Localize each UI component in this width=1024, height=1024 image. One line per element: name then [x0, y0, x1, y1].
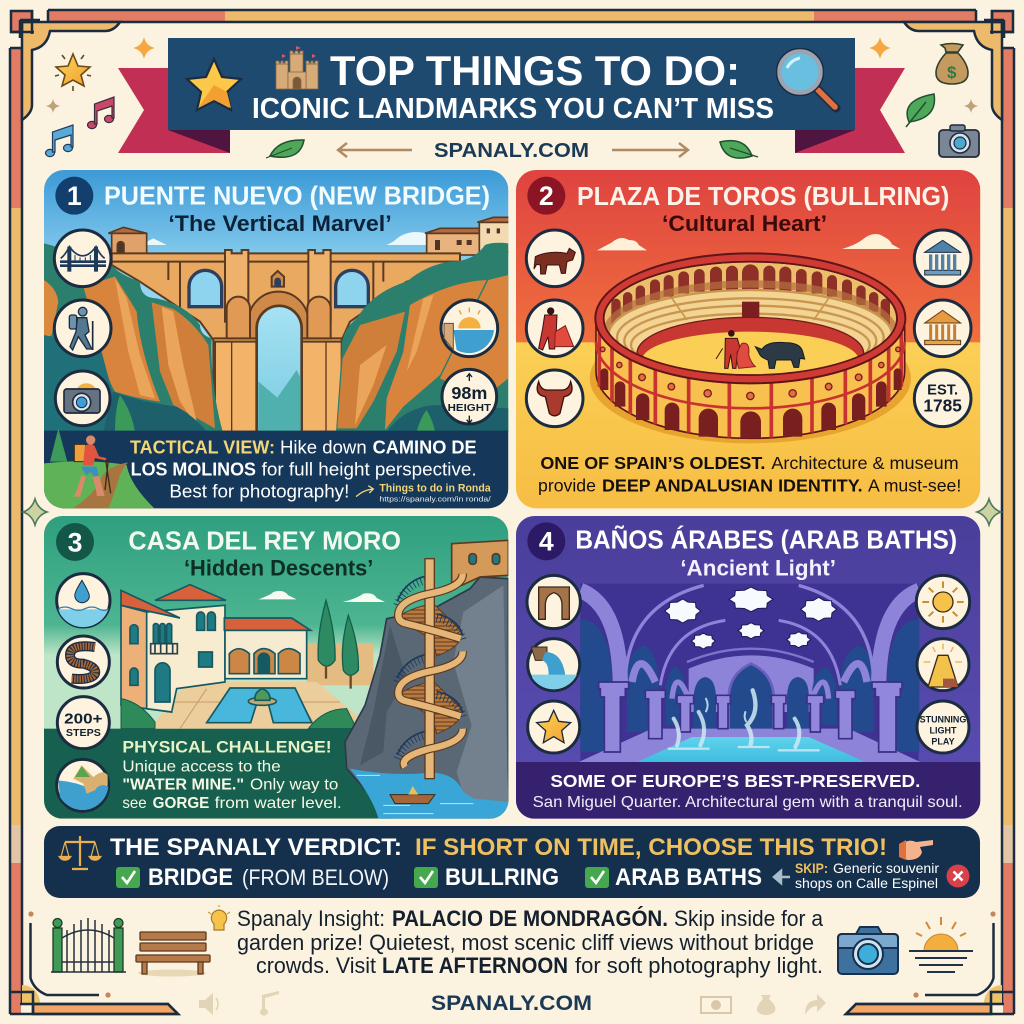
tip text [130, 437, 477, 502]
icon: water drop [57, 574, 110, 627]
tip text: for full height perspective. [262, 459, 477, 480]
icon: light bulb [208, 905, 230, 930]
bullring illustration [590, 253, 911, 443]
verdict headline [110, 834, 887, 861]
arrow to skip note [774, 871, 790, 883]
challenge text: GORGE [153, 795, 209, 812]
challenge text: see [122, 795, 147, 812]
icon: blue music note [46, 125, 73, 157]
icon: sunset over water [441, 300, 498, 357]
link text: https://spanaly.com/in ronda/ [379, 495, 492, 504]
number badge [527, 522, 565, 560]
icon: museum gold [914, 300, 971, 357]
icon: bull head [526, 370, 583, 427]
floor [579, 729, 920, 762]
icon: sunset [909, 917, 973, 972]
check item: bullring: BULLRING [445, 864, 559, 891]
subheading: ‘Cultural Heart’ [662, 211, 827, 236]
icon: steps stat: 200+ [64, 711, 102, 727]
check item: bridge: (FROM BELOW) [242, 865, 389, 890]
icon: star [528, 701, 580, 753]
tip text: Hike down [280, 437, 367, 458]
icon: scales [60, 836, 100, 869]
verdict headline: IF SHORT ON TIME, CHOOSE THIS TRIO! [415, 834, 887, 861]
villa [121, 585, 311, 712]
right cliffs [336, 243, 508, 432]
description text [538, 453, 961, 496]
cypress trees [318, 600, 358, 689]
website url footer: SPANALY.COM [431, 992, 592, 1015]
panel: puente nuevo [44, 170, 511, 509]
spiral staircase [397, 559, 463, 779]
verdict bar [44, 826, 980, 898]
icon: hiker [54, 300, 111, 357]
icon: banner star [187, 59, 241, 110]
hiker figure [73, 435, 111, 497]
icon: small star with rays [55, 54, 91, 91]
tip text: CAMINO DE [373, 437, 477, 458]
insight text: crowds. Visit [256, 953, 376, 978]
distant wall [307, 644, 373, 685]
check item: arab baths: ARAB BATHS [615, 864, 762, 891]
link text [379, 483, 492, 504]
icon: height stat [442, 369, 497, 424]
pool with fountain [207, 688, 312, 723]
arrow right [612, 143, 688, 157]
decorative sparkle cluster [23, 37, 1001, 525]
garden hedges [121, 699, 357, 729]
icon: leaf left [266, 140, 304, 158]
challenge text: from water level. [215, 795, 342, 812]
bridge structure [112, 250, 460, 432]
main title: ICONIC LANDMARKS YOU CAN’T MISS [252, 93, 774, 125]
insight text: garden prize! Quietest, most scenic cliff views without bridge [237, 930, 814, 955]
faded footer icons right [701, 994, 826, 1015]
subheading: ‘The Vertical Marvel’ [168, 211, 392, 236]
description text: SOME OF EUROPE’S BEST-PRESERVED. [550, 771, 920, 791]
subheading: ‘Hidden Descents’ [184, 555, 373, 580]
heading: CASA DEL REY MORO [128, 525, 401, 555]
icon: spiral stairs [57, 636, 109, 688]
icon: matador [526, 300, 583, 357]
panel: banos arabes [516, 516, 980, 819]
number badge [56, 523, 94, 561]
icon: water spout [528, 639, 580, 691]
icon: established date: 1785 [923, 396, 962, 416]
header ribbon right [795, 68, 905, 153]
rock cliff [345, 577, 508, 819]
skip note [795, 860, 939, 891]
icon: sun [916, 575, 970, 629]
courtyard floor [150, 682, 373, 729]
icon: light play label [917, 701, 969, 753]
icon: money bag: $ [947, 63, 957, 82]
check item: bridge [116, 864, 389, 891]
panel: casa del rey moro [44, 516, 508, 819]
matador and cape [716, 330, 755, 368]
clouds [597, 234, 900, 250]
icon: light beam [917, 639, 969, 691]
left village building [108, 227, 147, 253]
icon: steps stat: STEPS [66, 728, 101, 739]
vault ribs [580, 585, 919, 699]
insight text: for soft photography light. [575, 953, 823, 978]
icon: camera top right [939, 125, 979, 157]
website url top: SPANALY.COM [434, 140, 589, 162]
icon: steps stat [57, 697, 109, 749]
badge number: 3 [68, 527, 82, 557]
icon: leaf right [906, 94, 934, 127]
icon: light play label: STUNNING [920, 715, 966, 725]
bull [755, 342, 805, 368]
icon: height stat: 98m [451, 383, 487, 403]
badge number: 2 [539, 181, 554, 211]
icon: red music note [88, 97, 114, 129]
badge number: 1 [67, 181, 82, 211]
description text [533, 771, 963, 811]
faded footer icons left [199, 991, 279, 1016]
skip note: Generic souvenir [833, 860, 939, 876]
right village buildings [425, 217, 511, 255]
vault interior [580, 584, 919, 762]
challenge text [122, 738, 342, 812]
heading: PLAZA DE TOROS (BULLRING) [577, 181, 949, 211]
number badge [55, 177, 93, 215]
title banner [168, 38, 855, 130]
icon: bridge [54, 230, 111, 287]
skip note: shops on Calle Espinel [795, 875, 938, 891]
river [350, 769, 508, 819]
icon: magnifying glass [776, 48, 836, 108]
number badge [527, 177, 565, 215]
insight text: Skip inside for a [674, 906, 824, 931]
caption band [44, 431, 508, 509]
heading: PUENTE NUEVO (NEW BRIDGE) [104, 180, 490, 210]
upper gallery arches [611, 264, 890, 325]
icon: bull [526, 230, 583, 287]
icon: bench [136, 932, 210, 976]
icon: camera bottom [838, 927, 898, 974]
arrow left [338, 143, 412, 157]
header ribbon left [118, 68, 230, 153]
icon: museum blue [914, 230, 971, 287]
main title: TOP THINGS TO DO: [330, 47, 740, 94]
tower [452, 540, 508, 585]
challenge text: Only way to [250, 776, 339, 793]
panel: plaza de toros [516, 170, 980, 509]
description text: ONE OF SPAIN’S OLDEST. [540, 453, 765, 473]
description text: DEEP ANDALUSIAN IDENTITY. [602, 476, 863, 496]
description text: A must-see! [868, 476, 961, 496]
tip text: TACTICAL VIEW: [130, 437, 275, 458]
arrow to link [356, 486, 373, 497]
caption band [516, 762, 980, 819]
icon: pointing hand [899, 840, 933, 860]
heading: BAÑOS ÁRABES (ARAB BATHS) [575, 525, 957, 555]
description text: Architecture & museum [771, 453, 959, 473]
challenge text: "WATER MINE." [122, 776, 244, 793]
main title [252, 47, 774, 125]
icon: castle [276, 46, 318, 89]
challenge text: Unique access to the [122, 758, 281, 775]
challenge text: PHYSICAL CHALLENGE! [122, 738, 332, 757]
clouds [258, 591, 385, 602]
insight text: PALACIO DE MONDRAGÓN. [392, 906, 668, 931]
icon: light play label: PLAY [931, 736, 955, 746]
icon: leaf right of url [720, 141, 758, 158]
icon: money bag [936, 44, 968, 84]
description text: provide [538, 476, 596, 496]
skip note: SKIP: [795, 860, 828, 876]
icon: height stat: HEIGHT [448, 403, 492, 414]
tip text: LOS MOLINOS [131, 459, 256, 480]
steam plumes [669, 690, 819, 750]
icon: garden gate [51, 918, 126, 972]
verdict headline: THE SPANALY VERDICT: [110, 834, 402, 861]
trail scene [44, 428, 155, 509]
ribbon fold left [168, 130, 230, 153]
insight text: Spanaly Insight: [237, 906, 385, 931]
icon: red cross [946, 864, 970, 888]
icon: light play label: LIGHT [930, 726, 957, 736]
badge number: 4 [539, 527, 554, 557]
icon: established date: EST. [927, 382, 958, 398]
link text: Things to do in Ronda [379, 483, 491, 495]
subheading: ‘Ancient Light’ [680, 555, 836, 580]
tip text: Best for photography! [169, 481, 349, 502]
icon: camera with sun [55, 371, 110, 426]
icon: arch [527, 575, 580, 629]
gorge distance inside arch [258, 370, 301, 432]
check item: bridge: BRIDGE [148, 864, 233, 891]
bath water [637, 737, 865, 762]
icon: river bend [57, 759, 109, 811]
left cliffs [44, 243, 223, 432]
insight text: LATE AFTERNOON [382, 953, 568, 978]
caption band [44, 729, 394, 819]
icon: established date [914, 370, 971, 427]
star skylights [665, 587, 837, 649]
ribbon fold right [795, 130, 855, 153]
description text: San Miguel Quarter. Architectural gem with a tranquil soul. [533, 794, 963, 811]
insight text [237, 906, 824, 978]
columns [599, 682, 902, 752]
